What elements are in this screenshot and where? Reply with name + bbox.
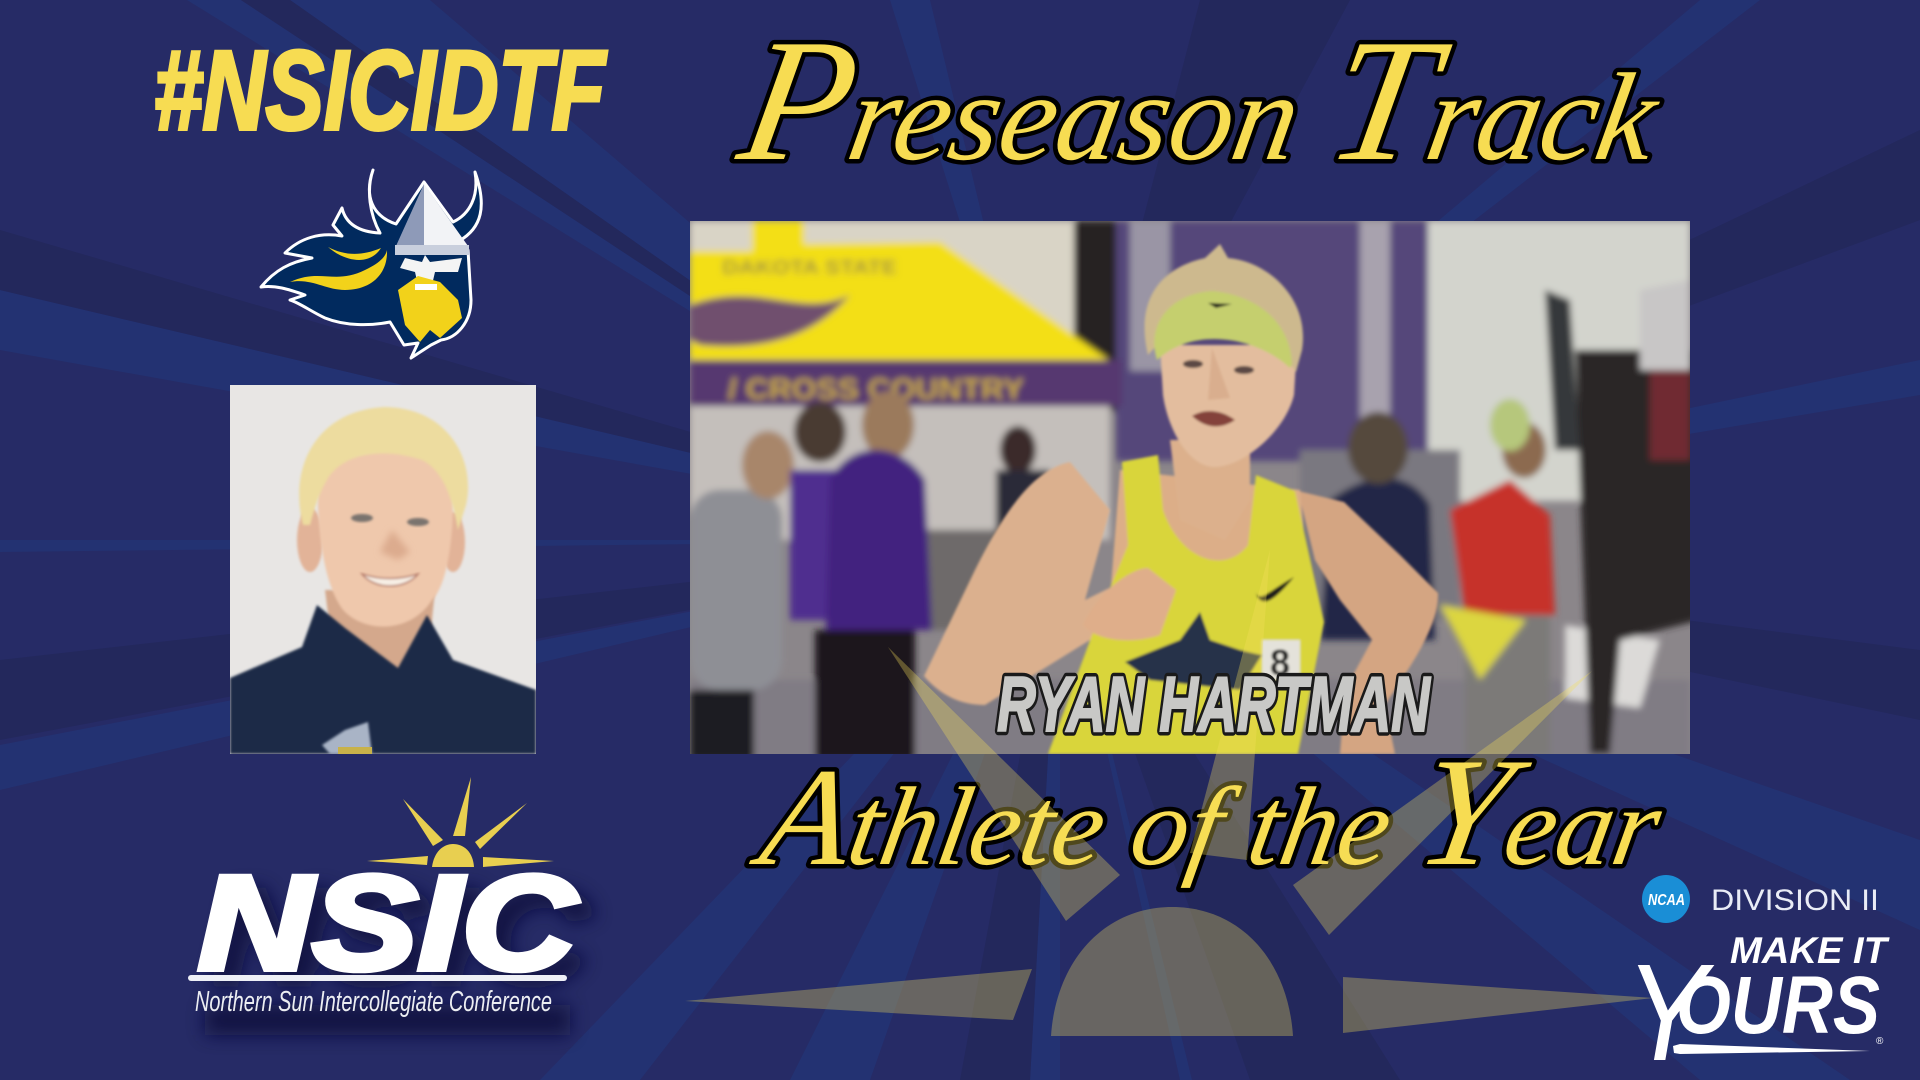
NCAA Division II: DIVISION II (1711, 884, 1879, 917)
runner: 8 (1270, 642, 1290, 683)
crowd right (1320, 478, 1435, 640)
jacket (230, 605, 536, 754)
tent (690, 221, 1109, 360)
athlete name: RYAN HARTMAN (997, 660, 1431, 748)
athlete name: RYAN HARTMAN (997, 660, 1431, 748)
NCAA Division II (1642, 875, 1879, 923)
runner (924, 244, 1438, 754)
fist (1083, 568, 1176, 640)
jacket logo (322, 722, 372, 754)
sun watermark (685, 550, 1653, 1036)
arms (923, 462, 1111, 706)
athlete name (997, 660, 1431, 748)
jersey swoosh (1255, 577, 1294, 602)
nose (380, 530, 410, 560)
jersey logo (1125, 612, 1262, 690)
jersey (1048, 455, 1324, 754)
NCAA Division II: NCAA (1648, 892, 1685, 909)
NSIC logo: Northern Sun Intercollegiate Conference (195, 986, 552, 1018)
Make It Yours logo (1625, 930, 1890, 1080)
photo background: DAKOTA STATE (722, 257, 897, 279)
photo background: / CROSS COUNTRY (728, 373, 1024, 406)
crowd left (690, 490, 782, 690)
NSIC logo (188, 777, 593, 1035)
neck (324, 588, 436, 669)
title line 1: Preseason Track (727, 4, 1677, 198)
bib (1262, 640, 1300, 680)
ears (297, 508, 323, 572)
smile (362, 574, 418, 586)
hair (299, 407, 468, 530)
headband (1154, 291, 1292, 368)
face (318, 450, 453, 627)
icon: Augustana Vikings logo (261, 170, 481, 358)
photo background (690, 221, 1700, 760)
portrait photo (230, 385, 536, 754)
neck (1168, 438, 1252, 486)
logo sun (367, 777, 554, 867)
eyes and mouth (1183, 360, 1203, 368)
Make It Yours logo: OURS (1676, 960, 1880, 1051)
logo shadow: NSIC (212, 863, 593, 1012)
face (1160, 345, 1297, 467)
eyes (351, 514, 373, 522)
NSIC logo: NSIC (198, 849, 579, 998)
Make It Yours logo: ® (1876, 1036, 1884, 1047)
title line 2: Athlete of the Year (743, 726, 1678, 898)
swoosh (1208, 303, 1232, 308)
hashtag: #NSICIDTF (154, 28, 607, 153)
hair (1145, 244, 1303, 372)
main action photo (690, 221, 1700, 760)
Make It Yours logo: MAKE IT (1730, 930, 1890, 971)
